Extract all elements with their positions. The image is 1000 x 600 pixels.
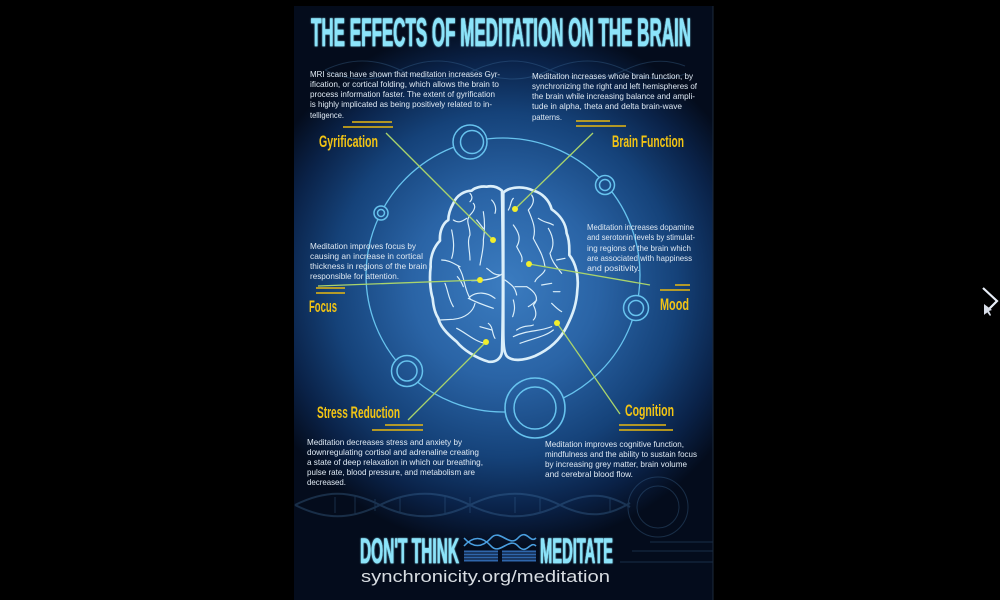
- text: gyrification: is highly implicated as being positively related to in-: [310, 99, 492, 109]
- orbit ring with satellite circles: [366, 125, 648, 438]
- text: stress reduction: a state of deep relaxation in which our breathing,: [307, 457, 483, 467]
- text: focus: responsible for attention.: [310, 271, 399, 281]
- satellite: left: [374, 206, 388, 220]
- text: focus: Meditation improves focus by: [310, 241, 417, 251]
- text: cognition: by increasing grey matter, brain volume: [545, 459, 687, 469]
- text: brain function: Meditation increases whole brain function, by: [532, 71, 694, 81]
- footer url: synchronicity.org/meditation: [361, 567, 610, 586]
- label: Stress Reduction: [317, 403, 423, 430]
- label: Brain Function: Brain Function: [612, 132, 684, 151]
- text: focus: [310, 241, 427, 281]
- text: stress reduction: [307, 437, 483, 487]
- label: Mood: Mood: [660, 295, 689, 314]
- label: Mood: [660, 285, 690, 314]
- text: focus: causing an increase in cortical: [310, 251, 423, 261]
- connector: brain function: [512, 133, 593, 212]
- connector: focus: [318, 277, 483, 286]
- label: Cognition: Cognition: [625, 401, 674, 420]
- text: gyrification: telligence.: [310, 110, 344, 120]
- label: Focus: [309, 288, 345, 316]
- satellite: lower left: [392, 356, 422, 386]
- footer slogan: DON'T THINK: [360, 532, 459, 571]
- satellite: right: [624, 296, 648, 320]
- poster panel: [294, 6, 713, 600]
- text: mood: [587, 222, 695, 273]
- text: gyrification: process information faster. The extent of gyrification: [310, 89, 495, 99]
- text: stress reduction: decreased.: [307, 477, 346, 487]
- text: stress reduction: pulse rate, blood pressure, and metabolism are: [307, 467, 475, 477]
- left hemisphere outline: [430, 186, 503, 362]
- text: gyrification: MRI scans have shown that meditation increases Gyr-: [310, 69, 500, 79]
- decorative DNA and circle motif: [295, 61, 713, 562]
- text: mood: ing regions of the brain which: [587, 243, 691, 253]
- text: focus: thickness in regions of the brain: [310, 261, 427, 271]
- text: mood: are associated with happiness: [587, 253, 692, 263]
- text: gyrification: [310, 69, 500, 120]
- label: Gyrification: Gyrification: [319, 132, 378, 151]
- text: brain function: synchronizing the right and left hemispheres of: [532, 81, 698, 91]
- left hemisphere folds: [440, 193, 502, 343]
- text: stress reduction: Meditation decreases stress and anxiety by: [307, 437, 463, 447]
- satellite: top: [453, 125, 487, 159]
- panel edge: [712, 6, 714, 600]
- text: MEDITATE: [540, 532, 613, 571]
- text: mood: Meditation increases dopamine: [587, 222, 694, 232]
- label: Gyrification: [319, 122, 393, 151]
- text: cognition: Meditation improves cognitive function,: [545, 439, 684, 449]
- connector: stress reduction: [408, 339, 489, 420]
- text: brain function: [532, 71, 698, 122]
- text: brain function: patterns.: [532, 112, 562, 122]
- text: cognition: mindfulness and the ability to sustain focus: [545, 449, 697, 459]
- label: Brain Function: [576, 121, 684, 151]
- satellite: bottom: [505, 378, 565, 438]
- text: brain function: tude in alpha, theta and delta brain-wave: [532, 101, 682, 111]
- right hemisphere folds: [505, 195, 565, 343]
- text: cognition: [545, 439, 697, 479]
- text: brain function: the brain while increasing balance and ampli-: [532, 91, 695, 101]
- label: Focus: Focus: [309, 297, 337, 316]
- text: mood: and positivity.: [587, 263, 640, 273]
- text: gyrification: ification, or cortical folding, which allows the brain to: [310, 79, 499, 89]
- label: Stress Reduction: Stress Reduction: [317, 403, 400, 422]
- satellite: upper right: [596, 176, 614, 194]
- label: Cognition: [619, 401, 674, 430]
- brain: [430, 186, 578, 362]
- icon: DNA helix with bars: [464, 535, 536, 560]
- connector: mood: [526, 261, 650, 285]
- icon: next arrow with cursor: [983, 288, 997, 316]
- right hemisphere outline: [503, 187, 578, 360]
- text: mood: and serotonin levels by stimulat-: [587, 232, 695, 242]
- text: stress reduction: downregulating cortisol and adrenaline creating: [307, 447, 479, 457]
- connector: cognition: [554, 320, 620, 414]
- text: cognition: and cerebral blood flow.: [545, 469, 633, 479]
- connector: gyrification: [386, 133, 496, 243]
